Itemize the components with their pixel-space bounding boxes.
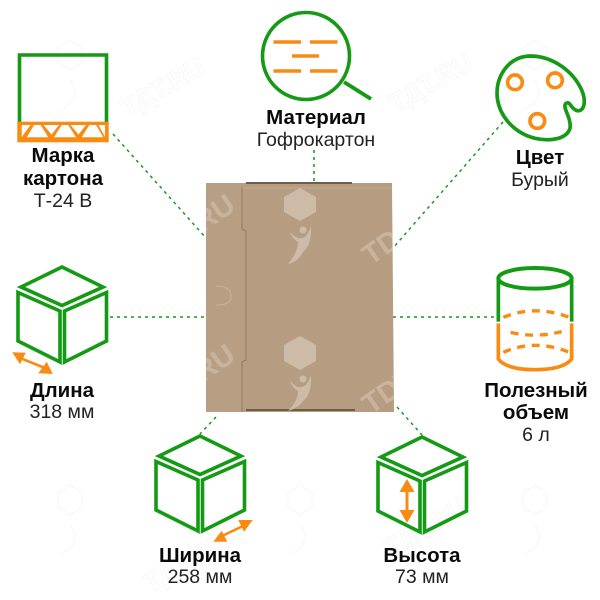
heading: carton grade: Марка	[32, 144, 95, 167]
connector: carton grade to box	[113, 134, 206, 238]
icon: cube with length arrow	[12, 267, 106, 374]
panel: colour	[497, 56, 584, 191]
heading line 2: картона	[23, 167, 104, 190]
box watermark: text: RU	[189, 339, 241, 389]
value: colour: Бурый	[511, 169, 569, 191]
box watermark: text: TDT	[357, 362, 421, 421]
connector: colour to box	[393, 122, 503, 248]
heading: length: Длина	[30, 379, 95, 402]
heading: width: Ширина	[159, 544, 242, 567]
heading: colour: Цвет	[516, 146, 564, 169]
panel: length	[12, 267, 106, 423]
panel: height	[378, 437, 466, 588]
icon: cylinder	[498, 268, 572, 370]
heading: material: Материал	[266, 106, 366, 129]
watermark pattern: ТДТ.RU	[383, 46, 478, 118]
watermark pattern: ТДТ.RU	[115, 51, 210, 123]
panel: useful volume	[484, 268, 588, 446]
watermark pattern	[58, 40, 547, 598]
watermark pattern: ТДТ.RU	[138, 526, 233, 598]
box watermark: bottom cube	[284, 336, 316, 411]
icon: cube with height arrow	[378, 437, 466, 532]
icon: corrugated cardboard	[17, 55, 109, 142]
value: useful volume: 6 л	[522, 424, 550, 446]
connector: width to box	[200, 417, 216, 434]
value: width: 258 мм	[168, 566, 232, 588]
icon: magnifier	[262, 12, 371, 100]
panel: width	[156, 436, 253, 588]
value: length: 318 мм	[30, 401, 94, 423]
box watermark: top cube	[284, 188, 316, 264]
icon: palette	[497, 56, 584, 140]
cardboard box photo	[206, 182, 394, 412]
heading: useful volume: Полезный	[484, 379, 588, 402]
panel: carton grade	[17, 55, 109, 212]
panel: material	[257, 12, 375, 151]
value: material: Гофрокартон	[257, 129, 375, 151]
connector: volume to box	[393, 316, 496, 318]
value: height: 73 мм	[395, 566, 449, 588]
box watermark: text	[206, 194, 394, 411]
icon: cube with width arrow	[156, 436, 253, 542]
connector: material to box	[313, 150, 315, 183]
connector: height to box	[397, 407, 422, 435]
connector: length to box	[110, 316, 206, 318]
box watermark: text: RU	[189, 189, 241, 239]
heading line 2: объем	[503, 401, 569, 424]
box watermark: text: TDT	[357, 213, 421, 272]
value: carton grade: Т-24 В	[34, 190, 92, 212]
watermark pattern: ТДТ.RU	[378, 491, 473, 563]
heading: height: Высота	[383, 544, 461, 567]
